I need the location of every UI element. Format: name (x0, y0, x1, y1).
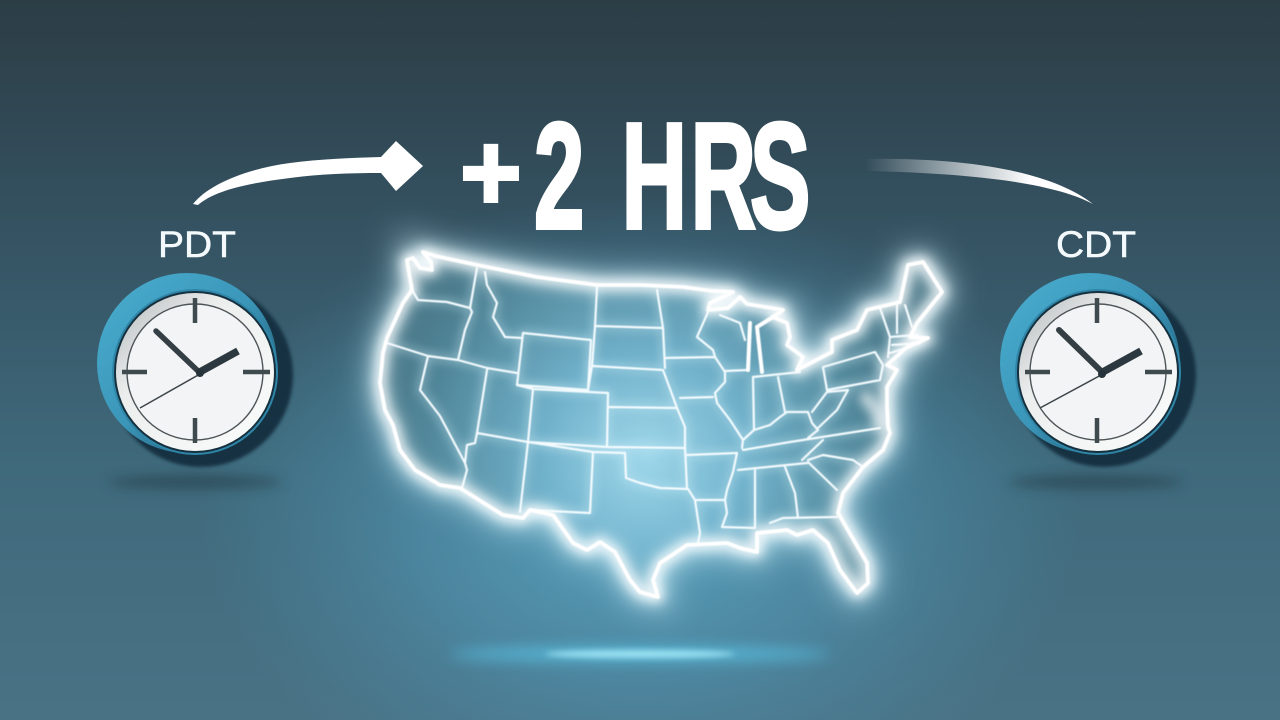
map interior fill (380, 252, 942, 597)
title: +2 HRS: 2 (534, 92, 584, 261)
title: +2 HRS: + (460, 110, 522, 233)
title: +2 HRS: H (622, 92, 687, 261)
clock shadow: left (107, 476, 283, 488)
title: +2 HRS: S (750, 92, 810, 261)
map: glowing United States (380, 252, 942, 597)
title: +2 HRS: R (691, 92, 756, 261)
map state borders (387, 268, 920, 543)
map Great Lakes and Chesapeake bright shores (748, 317, 880, 424)
title: +2 HRS (460, 92, 810, 261)
map coastline glow (380, 252, 942, 597)
arrow: curved arrow from PDT to title (193, 141, 423, 205)
map coastline wide glow (380, 252, 942, 597)
arrow: fading curve toward CDT (865, 159, 1093, 204)
map outer halo (380, 252, 942, 597)
map inner glow from state lines (387, 268, 920, 543)
label: CDT: CDT (1056, 224, 1136, 265)
label: PDT: PDT (158, 224, 236, 265)
glow bar beneath map (450, 646, 830, 662)
clock: CDT (1000, 273, 1196, 467)
clock: PDT (97, 273, 293, 467)
map coastline (380, 252, 942, 597)
clock shadow: right (1008, 476, 1184, 488)
